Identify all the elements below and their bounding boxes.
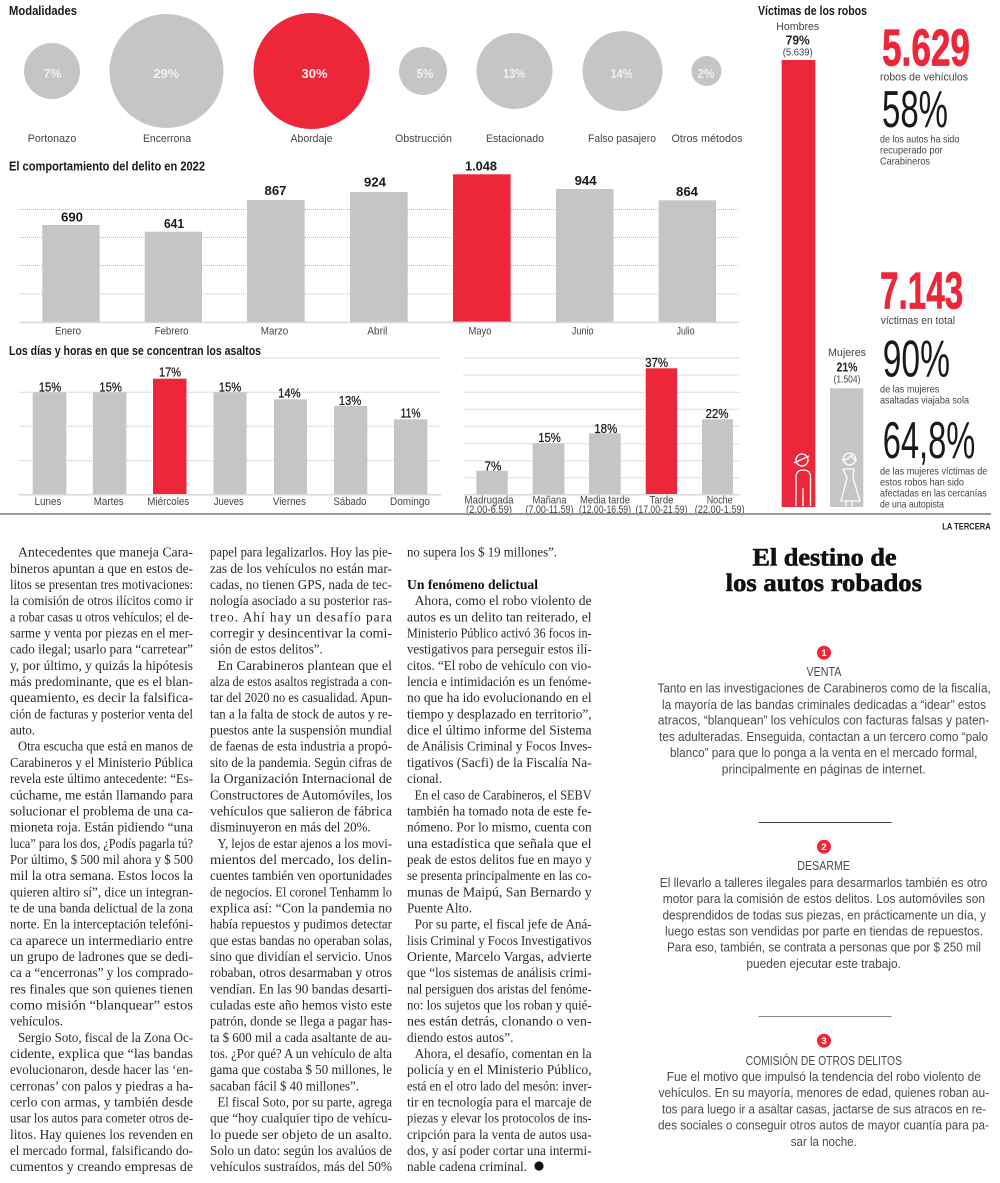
text column 3: Oriente, Marcelo Vargas, advierte xyxy=(407,949,592,964)
bubble: otros metodos xyxy=(672,56,743,145)
text column 1: como misión “blanquear” estos xyxy=(10,998,193,1012)
text column 3: cripción para la venta de autos usa- xyxy=(407,1127,592,1142)
bar chart: dias de la semana: Viernes xyxy=(273,496,306,508)
bar chart: horas del dia: Madrugada xyxy=(464,494,514,506)
text column 2: papel para legalizarlos. Hoy las pie- xyxy=(210,545,392,560)
text column 1: ca a “encerronas” y los comprado- xyxy=(10,965,193,980)
icon: man xyxy=(794,454,810,506)
bar chart: horas del dia: (2.00-6.59) xyxy=(466,504,512,516)
text column 1: norte. En la interceptación telefóni- xyxy=(10,917,193,932)
text column 2: de faenas de esta industria a propó- xyxy=(210,739,392,754)
text column 3: Ahora, el desafío, comentan en la xyxy=(415,1046,592,1061)
text column 2: Y, lejos de estar ajenos a los movi- xyxy=(218,836,392,851)
text column 2: zas de los vehículos no están mar- xyxy=(210,561,392,576)
bar: hombres xyxy=(776,21,820,507)
bar chart: dias de la semana: 13% xyxy=(339,393,362,408)
item 2: desarme: DESARME xyxy=(797,858,850,873)
bar chart: meses: 867 xyxy=(264,183,286,198)
item 3: comision de otros delitos: COMISIÓN DE OTROS DELITOS xyxy=(746,1053,902,1068)
bubble: falso pasajero xyxy=(582,31,662,145)
bar chart: meses: 864 xyxy=(676,184,699,199)
text column 1: luca” para los dos, ¿Podís pagarla tú? xyxy=(10,836,193,851)
text column 1: a robar casas u otros vehículos; el de- xyxy=(10,609,193,624)
text column 2: robaban, otros desarmaban y otros xyxy=(210,965,392,980)
bar chart: meses: Marzo xyxy=(261,326,288,338)
stat: 64,8% autopista: de una autopista xyxy=(880,498,944,510)
text column 2: de negocios. El coronel Tenhamm lo xyxy=(210,884,392,899)
text column 3: Por su parte, el fiscal jefe de Aná- xyxy=(415,917,592,932)
bar chart: dias de la semana: Martes xyxy=(94,496,124,508)
text column 2: corregir y desincentivar la comi- xyxy=(210,626,393,641)
text column 2: culadas este año hemos visto este xyxy=(210,998,392,1012)
stat: 58% recuperado xyxy=(880,81,959,167)
text column 1: mil la otra semana. Estos locos la xyxy=(10,868,193,883)
item 3: comision de otros delitos: Fue el motivo que impulsó la tendencia del robo violento de xyxy=(667,1069,981,1084)
bubble: portonazo xyxy=(24,43,80,145)
text column 3: no que ha ido evolucionando en el xyxy=(407,690,592,705)
bar chart: horas del dia: Media tarde xyxy=(580,494,630,506)
bar chart: meses: Enero xyxy=(55,326,81,338)
heading: modalidades: Modalidades xyxy=(9,4,77,18)
bar chart: dias de la semana: Jueves xyxy=(214,496,244,508)
stat: 58% recuperado: 58% xyxy=(882,81,948,139)
item 1: venta: 1 xyxy=(821,648,827,659)
bar chart: dias de la semana: 15% xyxy=(219,380,242,394)
text column 3: una estadística que señala que el xyxy=(407,836,592,851)
text column 3: munas de Maipú, San Bernardo y xyxy=(407,884,592,899)
bar chart: dias de la semana: Miércoles xyxy=(147,496,190,508)
text column 1: quieren altiro sí”, dice un integran- xyxy=(10,884,193,899)
text column 1: Por último, $ 500 mil ahora y $ 500 xyxy=(10,852,193,867)
stat: 90% mujeres xyxy=(880,331,969,407)
stat: 7.143 victimas: víctimas en total xyxy=(881,315,955,327)
text column 1: y, por último, y quizás la hipótesis xyxy=(10,658,193,673)
text column 1: cerronas’ con palos y piedras a ha- xyxy=(10,1078,193,1093)
bar chart: horas del dia: 15% xyxy=(538,430,561,445)
text column 1: cúchame, me están llamando para xyxy=(10,787,193,802)
title: El destino de xyxy=(752,544,896,572)
bar chart: meses: Junio xyxy=(572,326,594,338)
bar chart: horas del dia: (12.00-16.59) xyxy=(579,504,631,516)
stat: 64,8% autopista: estos robos han sido xyxy=(880,477,964,489)
bar chart: horas del dia: 22% xyxy=(706,406,729,421)
bubble: falso pasajero: 14% xyxy=(611,67,633,81)
bar: hombres: Hombres xyxy=(776,21,820,33)
bar chart: horas del dia: Noche xyxy=(707,494,733,506)
panel: el destino de los autos robados xyxy=(658,544,991,1149)
end mark xyxy=(534,1161,544,1171)
text column 1: cidente, explica que “las bandas xyxy=(10,1046,193,1061)
text column 2: había repuestos y pudimos detectar xyxy=(210,917,392,932)
bar chart: meses: Mayo xyxy=(468,326,492,338)
text column 2: vehículos que salieron de fábrica xyxy=(210,803,392,818)
bar chart: meses: 641 xyxy=(164,216,184,231)
bubble: obstruccion: Obstrucción xyxy=(395,133,452,145)
text column 3: también ha tomado nota de este fe- xyxy=(407,803,592,818)
item 2: desarme: pueden ejecutar este trabajo. xyxy=(746,956,901,971)
text column 3: tir en tecnología para el marcaje de xyxy=(407,1094,592,1110)
text column 2: gama que costaba $ 50 millones, le xyxy=(210,1062,392,1077)
text column 1: usar los autos para cometer otros de- xyxy=(10,1111,193,1126)
text column 3 xyxy=(407,545,592,1174)
item 3: comision de otros delitos: sar la noche. xyxy=(791,1134,857,1149)
bar: mujeres xyxy=(828,347,866,507)
text column 3: nes están detrás, clonando o ven- xyxy=(407,1014,592,1029)
stat: 5.629 robos xyxy=(880,20,970,84)
text column 3: nal persiguen dos aristas del fenóme- xyxy=(407,981,592,996)
text column 3: se presenta principalmente en las co- xyxy=(407,868,592,883)
text column 2: tan a la falta de stock de autos y re- xyxy=(210,706,392,721)
text column 1: Sergio Soto, fiscal de la Zona Oc- xyxy=(18,1030,193,1045)
text column 3: cional. xyxy=(407,771,442,786)
item 2: desarme xyxy=(660,840,987,971)
text column 1: mioneta roja. Están pidiendo “una xyxy=(10,820,193,835)
text column 1: cumentos y creando empresas de xyxy=(10,1159,193,1174)
bar chart: meses: 924 xyxy=(364,174,387,190)
stat: 64,8% autopista xyxy=(880,412,987,510)
stat: 5.629 robos: robos de vehículos xyxy=(880,72,968,84)
panel: victimas de los robos xyxy=(758,4,987,510)
text column 1: Antecedentes que maneja Cara- xyxy=(18,545,194,560)
item 3: comision de otros delitos xyxy=(658,1034,989,1149)
text column 3: Ahora, como el robo violento de xyxy=(415,593,592,608)
bar chart: meses xyxy=(19,158,739,338)
bubble: obstruccion xyxy=(395,47,452,145)
bar chart: horas del dia xyxy=(464,355,745,516)
bar chart: dias de la semana: 17% xyxy=(159,364,181,380)
bubble: obstruccion: 5% xyxy=(416,67,434,81)
text column 2: nología asociado a su posterior ras- xyxy=(210,593,392,608)
text column 2: sino que dividían el servicio. Unos xyxy=(210,949,392,964)
bubble: estacionado: 13% xyxy=(503,67,525,81)
text column 2: la Organización Internacional de xyxy=(210,771,392,786)
bar chart: horas del dia: 18% xyxy=(594,421,618,436)
text column 1: te de una banda delictual de la zona xyxy=(10,900,193,915)
text column 2: vendían. En las 90 bandas desarti- xyxy=(210,981,392,996)
bubble: encerrona xyxy=(110,14,224,145)
text column 3: lisis Criminal y Focos Investigativos xyxy=(407,933,592,948)
bubble: abordaje: 30% xyxy=(302,67,328,81)
text column 3: nómeno. Por lo mismo, cuenta con xyxy=(407,820,592,835)
bar chart: horas del dia: 37% xyxy=(645,355,668,370)
text column 2: mientos del mercado, los delin- xyxy=(210,852,393,867)
text column 2: lo puede ser objeto de un asalto. xyxy=(210,1127,392,1142)
text column 2: tos. ¿Por qué? A un vehículo de alta xyxy=(210,1046,392,1061)
bar: hombres: 79% xyxy=(786,32,810,48)
text column 2: treo. Ahí hay un desafío para xyxy=(210,609,392,624)
text column 3: está en el otro lado del mesón: inver- xyxy=(407,1078,592,1093)
bar chart: horas del dia: (22.00-1.59) xyxy=(695,504,745,516)
text column 3: que “los sistemas de análisis crimi- xyxy=(407,965,592,980)
text column 3: Puente Alto. xyxy=(407,900,472,915)
stat: 58% recuperado: de los autos ha sido xyxy=(880,133,959,145)
text column 1: bineros apuntan a que en estos de- xyxy=(10,561,193,576)
bar chart: meses: Abril xyxy=(367,326,387,338)
item 1: venta xyxy=(658,646,991,776)
text column 1: res finales que son quienes tienen xyxy=(10,981,193,996)
stat: 90% mujeres: de las mujeres xyxy=(880,384,939,396)
text column 3: En el caso de Carabineros, el SEBV xyxy=(415,787,592,802)
bar chart: horas del dia: (17.00-21.59) xyxy=(636,504,688,516)
heading: victimas: Víctimas de los robos xyxy=(758,4,867,18)
text column 1: solucionar el problema de una ca- xyxy=(10,803,194,818)
bubble: abordaje: Abordaje xyxy=(290,133,332,145)
text column 1: evolucionaron, desde hacer las ‘en- xyxy=(10,1062,193,1077)
stat: 90% mujeres: asaltadas viajaba sola xyxy=(880,395,969,407)
text column 1: la comisión de otros ilícitos como ir xyxy=(10,593,193,608)
stat: 58% recuperado: recuperado por xyxy=(880,144,943,156)
bar: mujeres: Mujeres xyxy=(828,347,866,359)
bar chart: dias de la semana: 14% xyxy=(278,386,301,400)
bar chart: meses: Julio xyxy=(677,326,695,338)
text column 3: peak de estos delitos fue en mayo y xyxy=(407,852,592,867)
text column 3: autos es un delito tan reiterado, el xyxy=(407,609,592,624)
text column 2: Constructores de Automóviles, los xyxy=(210,787,392,802)
text column 1: cado ilegal; usarlo para “carretear” xyxy=(10,642,193,657)
text column 3: no: los sujetos que los roban y quié- xyxy=(407,998,592,1012)
bubble: otros metodos: 2% xyxy=(698,67,714,81)
text column 1: Otra escucha que está en manos de xyxy=(18,739,193,754)
bar chart: dias de la semana: Sábado xyxy=(334,496,366,508)
text column 2: ta $ 600 mil a cada asaltante de au- xyxy=(210,1030,392,1045)
text column 1: sarme y venta por piezas en el mer- xyxy=(10,626,193,641)
text column 3: de Análisis Criminal y Focos Inves- xyxy=(407,739,592,754)
text column 1: un grupo de ladrones que se dedi- xyxy=(10,949,194,964)
text column 1: cerlo con armas, y también desde xyxy=(10,1094,193,1110)
title: los autos robados xyxy=(726,570,922,597)
item 2: desarme: 2 xyxy=(821,842,827,853)
text column 3: citos. “El robo de vehículo con vio- xyxy=(407,658,592,673)
bar chart: horas del dia: (7.00-11.59) xyxy=(526,504,574,516)
text column 2: que estas bandas no operaban solas, xyxy=(210,933,392,948)
text column 2: alza de estos asaltos registrada a con- xyxy=(210,674,392,689)
text column 3: Ministerio Público activó 36 focos in- xyxy=(407,626,592,641)
bubble: portonazo: 7% xyxy=(44,67,62,81)
text column 3: piezas y elevar los protocolos de ins- xyxy=(407,1111,592,1126)
heading: comportamiento del delito: El comportamiento del delito en 2022 xyxy=(9,160,205,174)
bar chart: dias de la semana: 11% xyxy=(401,406,421,420)
bubble: encerrona: 29% xyxy=(154,67,179,81)
text column 1: revela este último antecedente: “Es- xyxy=(10,771,193,786)
stat: 90% mujeres: 90% xyxy=(883,331,950,389)
bubble: abordaje xyxy=(254,13,370,145)
text column 1: ca aparece un intermediario entre xyxy=(10,933,193,948)
text column 2: que “hoy cualquier tipo de vehícu- xyxy=(210,1111,392,1126)
text column 1 xyxy=(10,545,194,1174)
text column 1: litos. Hay quienes los revenden en xyxy=(10,1127,193,1142)
text column 2: sito de la pandemia. Según cifras de xyxy=(210,755,392,770)
bar: hombres: (5.639) xyxy=(783,48,813,58)
text column 2: Solo un dato: según los avalúos de xyxy=(210,1143,392,1158)
text column 1: el mercado formal, falsificando do- xyxy=(10,1143,193,1158)
bar chart: horas del dia: 7% xyxy=(484,458,502,474)
bar chart: meses: 944 xyxy=(575,173,597,188)
text column 1: Carabineros y el Ministerio Pública xyxy=(10,755,193,770)
text column 3: tigativos (Sacfi) de la Fiscalía Na- xyxy=(407,755,592,770)
text column 2: vehículos sustraídos, más del 50% xyxy=(210,1159,392,1174)
text column 2 xyxy=(210,545,393,1174)
text column 3: nable cadena criminal. xyxy=(407,1159,527,1174)
text column 3: lencia e intimidación es un fenóme- xyxy=(407,674,592,689)
text column 2: En Carabineros plantean que el xyxy=(218,658,392,673)
text column 3: no supera los $ 19 millones”. xyxy=(407,545,557,560)
stat: 58% recuperado: Carabineros xyxy=(880,155,930,167)
heading: dias y horas: Los días y horas en que se concentran los asaltos xyxy=(9,344,261,358)
text column 2: cuentes también ven oportunidades xyxy=(210,868,392,883)
bubble: otros metodos: Otros métodos xyxy=(672,133,743,145)
text column 1: auto. xyxy=(10,723,35,738)
item 3: comision de otros delitos: 3 xyxy=(821,1036,827,1047)
text column 1: más predominante, que es el blan- xyxy=(10,674,193,689)
text column 2: puestos ante la suspensión mundial xyxy=(210,723,392,738)
title xyxy=(726,544,922,597)
bar: mujeres: (1.504) xyxy=(834,374,860,386)
bar chart: meses: Febrero xyxy=(155,326,189,338)
bar chart: meses: 690 xyxy=(61,210,83,224)
bar chart: meses: 1.048 xyxy=(465,158,497,174)
stat: 7.143 victimas xyxy=(880,262,963,327)
bar chart: horas del dia: Tarde xyxy=(650,494,674,506)
text column 2: cadas, no tienen GPS, nada de tec- xyxy=(210,577,392,592)
text column 2: El fiscal Soto, por su parte, agrega xyxy=(218,1094,392,1110)
item 1: venta: VENTA xyxy=(806,664,842,679)
bar chart: dias de la semana: 15% xyxy=(39,380,62,394)
text column 2: explica así: “Con la pandemia no xyxy=(210,900,392,915)
bar chart: dias de la semana xyxy=(19,358,441,508)
text column 2: patrón, donde se llega a pagar has- xyxy=(210,1014,392,1029)
text column 2: sacaban fácil $ 40 millones”. xyxy=(210,1078,359,1093)
icon: woman xyxy=(841,453,860,506)
bubble: encerrona: Encerrona xyxy=(143,133,192,145)
text column 2: tar del 2020 no es casualidad. Apun- xyxy=(210,690,392,705)
bar chart: dias de la semana: Lunes xyxy=(34,496,62,508)
bubble: estacionado: Estacionado xyxy=(486,133,544,145)
text column 1: litos se presentan tres motivaciones: xyxy=(10,577,193,592)
text column 3: vestigativos para perseguir estos ilí- xyxy=(407,642,592,657)
item 1: venta: principalmente en páginas de internet. xyxy=(722,762,926,776)
text column 1: ción de facturas y posterior venta del xyxy=(10,706,193,721)
text column 3: dice el último informe del Sistema xyxy=(407,723,592,738)
bubble: falso pasajero: Falso pasajero xyxy=(588,133,656,145)
text column 1: queamiento, es decir la falsifica- xyxy=(10,690,194,705)
panel: modalidades xyxy=(9,4,743,145)
text column 2: sión de estos delitos”. xyxy=(210,642,323,657)
text column 3: tiempo y desplazado en territorio”, xyxy=(407,706,592,721)
bar chart: horas del dia: Mañana xyxy=(532,494,567,506)
text column 3: dos, y así poder cortar una intermi- xyxy=(407,1143,592,1158)
subheading: un fenomeno delictual: Un fenómeno delictual xyxy=(407,577,538,592)
bubble: estacionado xyxy=(476,33,552,145)
text column 1: vehículos. xyxy=(10,1014,63,1029)
text column 2: disminuyeron en más del 20%. xyxy=(210,820,371,835)
bubble: portonazo: Portonazo xyxy=(28,133,76,145)
bar chart: dias de la semana: Domingo xyxy=(390,496,430,508)
bar chart: dias de la semana: 15% xyxy=(99,380,122,394)
text column 3: policía y en el Ministerio Público, xyxy=(407,1062,592,1077)
text column 3: diendo estos autos”. xyxy=(407,1030,513,1045)
bar: mujeres: 21% xyxy=(836,360,858,374)
